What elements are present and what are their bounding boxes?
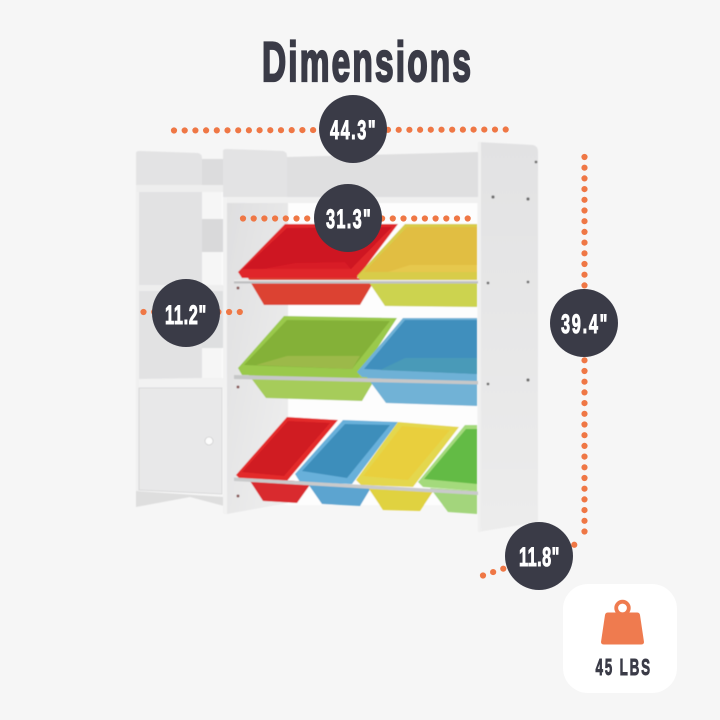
white backing area xyxy=(202,192,477,505)
middle side panel xyxy=(223,149,288,514)
badge: 11.2: 11.2" xyxy=(165,300,206,330)
bin row 3 xyxy=(234,417,478,514)
red bin xyxy=(238,224,398,305)
badge: 11.8 xyxy=(505,522,573,590)
badge: 11.2 xyxy=(152,279,220,347)
rail 3 xyxy=(234,478,478,495)
badge: 39.4 xyxy=(550,289,618,357)
cabinet door xyxy=(139,388,222,494)
yellow bin 3 xyxy=(356,422,459,511)
weight label: 45 LBS xyxy=(596,655,650,681)
top back panel xyxy=(287,152,478,197)
badge: 11.8: 11.8" xyxy=(519,542,559,572)
left cabinet unit xyxy=(136,151,224,507)
dotted line: height 39.4 xyxy=(581,157,588,542)
dotted line: inner width 31.3 xyxy=(243,215,470,222)
bin row 2 xyxy=(234,316,478,406)
badge: 44.3: 44.3" xyxy=(330,115,376,145)
yellow bin xyxy=(357,224,477,307)
blue bin 3 xyxy=(295,420,398,506)
green bin xyxy=(238,316,397,401)
red bin xyxy=(236,417,338,503)
dotted line: depth 11.8 xyxy=(483,542,584,576)
rail 2 xyxy=(234,375,478,384)
badge: 31.3: 31.3" xyxy=(326,204,371,234)
blue bin xyxy=(357,318,477,406)
green bin 3 xyxy=(418,425,477,514)
bin row 1 xyxy=(234,224,478,307)
side panel pegs xyxy=(236,286,240,498)
screw holes xyxy=(487,161,537,385)
door knob xyxy=(205,437,213,445)
badge: 39.4: 39.4" xyxy=(561,309,607,339)
rail 1 xyxy=(234,280,478,284)
title: Dimensions xyxy=(262,30,471,93)
badge: 31.3 xyxy=(314,184,382,252)
top shelf xyxy=(226,197,478,203)
right side panel xyxy=(478,142,538,532)
badge: 44.3 xyxy=(319,95,387,163)
dotted line: width 44.3 xyxy=(174,130,510,131)
product: toy storage organizer xyxy=(136,142,538,532)
weight card xyxy=(563,584,677,693)
dotted line: depth 11.2 xyxy=(144,309,241,315)
icon: weight xyxy=(601,602,644,644)
